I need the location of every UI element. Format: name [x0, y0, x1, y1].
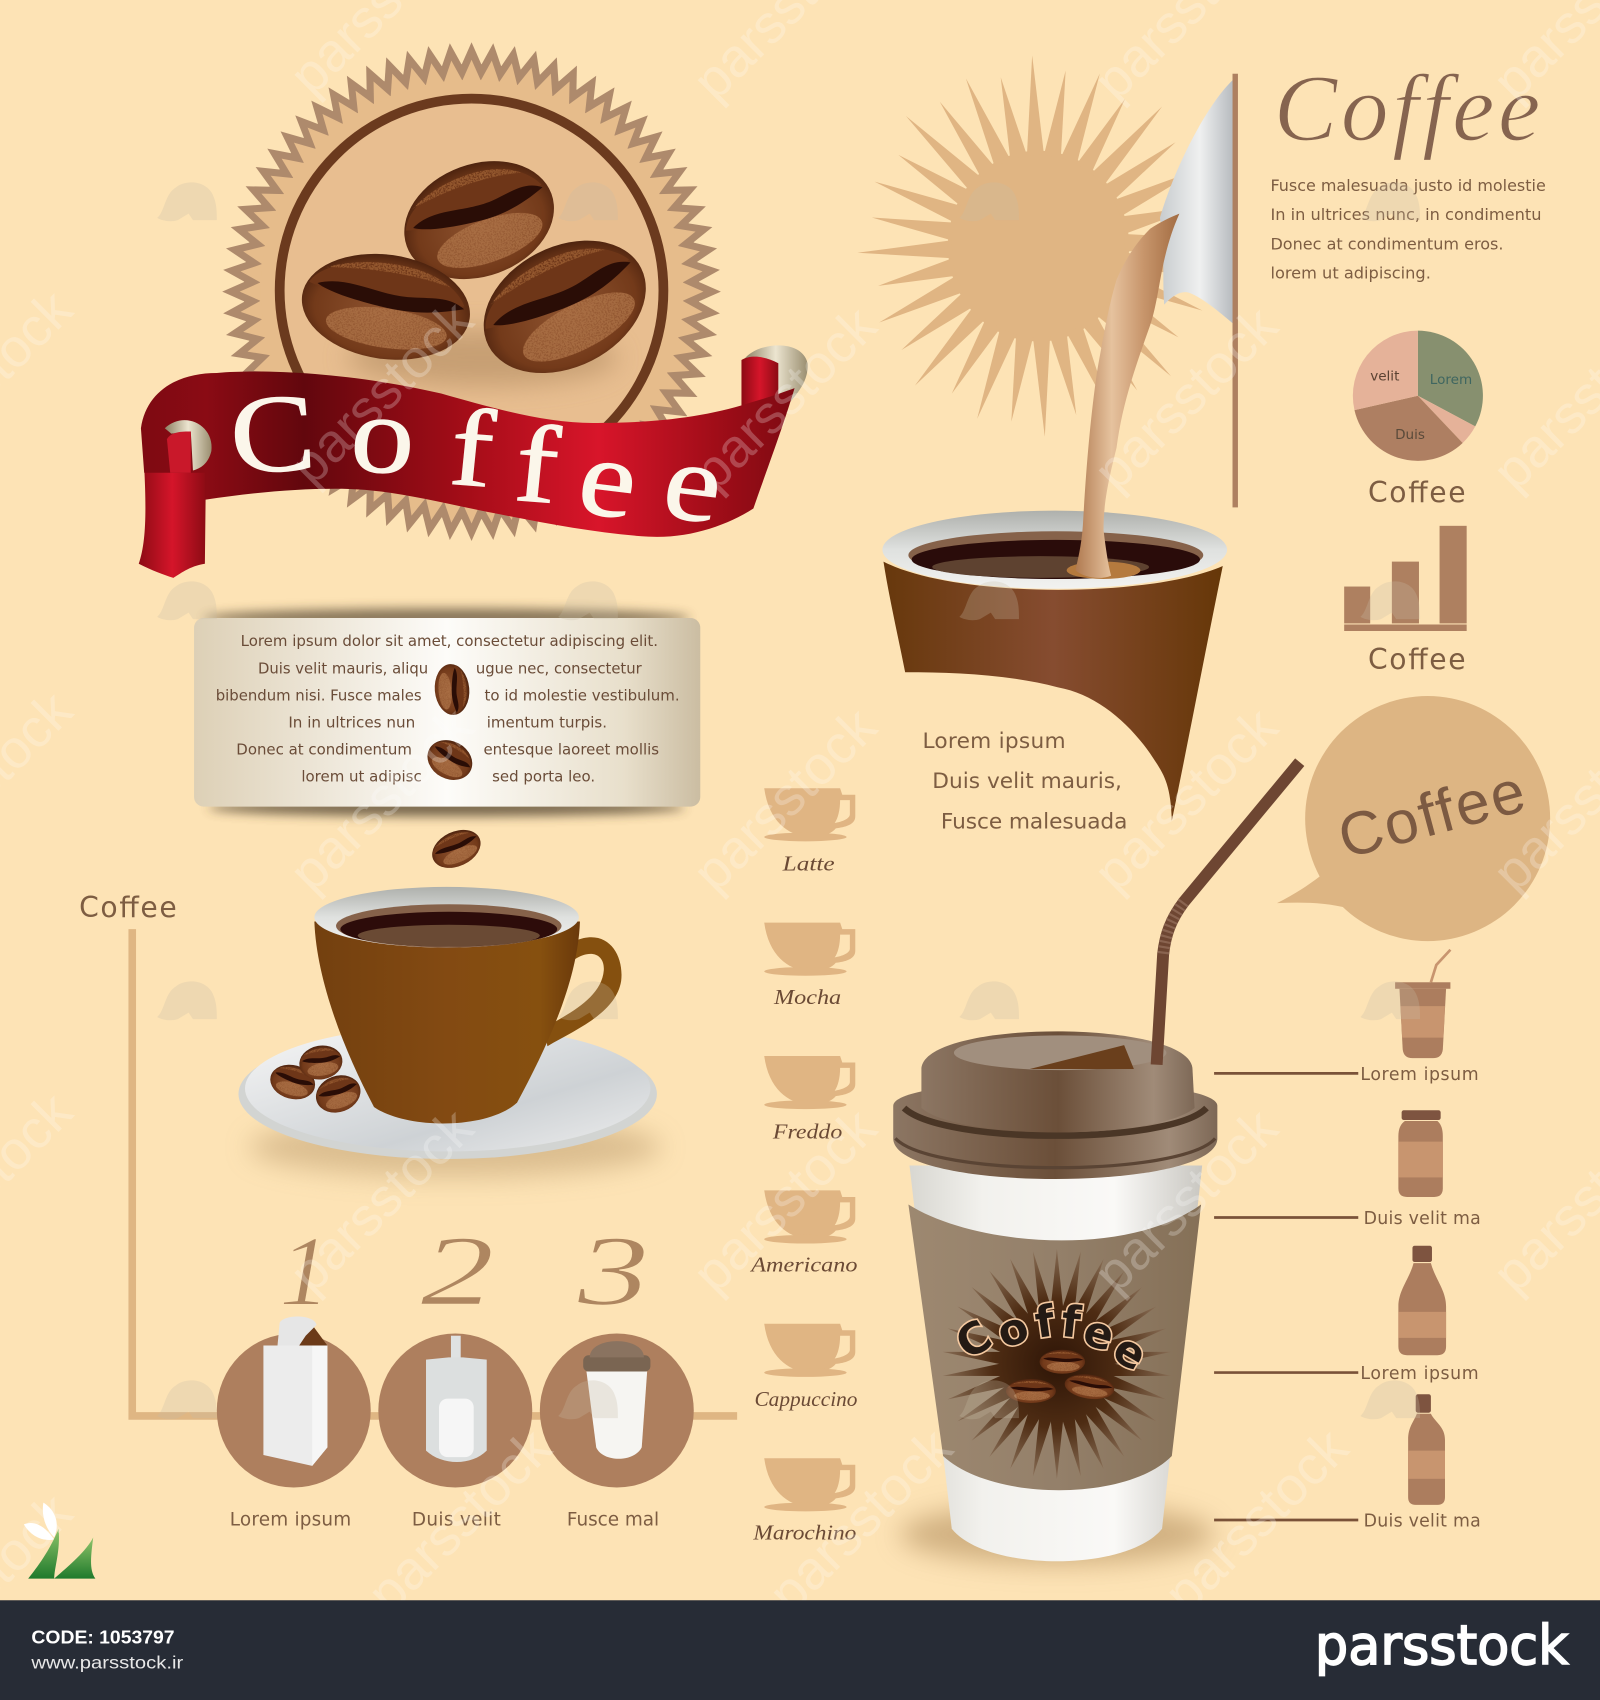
size legend — [1214, 950, 1481, 1532]
card text: Lorem ipsum dolor sit amet, consectetur adipiscing elit. — [241, 632, 658, 650]
pie labels — [1370, 369, 1472, 443]
intro paragraph: In in ultrices nunc, in condimentu — [1270, 205, 1541, 224]
card surface — [194, 618, 700, 807]
slice: velit — [1353, 331, 1418, 410]
saucer — [238, 1026, 657, 1159]
pie caption: Coffee — [1368, 476, 1466, 509]
bean shadows — [347, 330, 618, 386]
item: small bottle size — [1214, 1394, 1481, 1532]
item: Latte — [764, 788, 855, 876]
icon: coffee bean left — [295, 243, 477, 370]
label: Fusce mal — [567, 1509, 659, 1530]
item: Marochino: Marochino — [752, 1523, 856, 1545]
step 3: takeaway cup — [540, 1215, 694, 1530]
banner: red ribbon — [139, 345, 808, 578]
item: cup size — [1214, 950, 1479, 1085]
step 2: pouch — [378, 1215, 532, 1530]
card text: imentum turpis. — [487, 713, 607, 731]
cup body with tail — [883, 562, 1223, 821]
sunburst — [834, 31, 1243, 462]
handle — [544, 937, 622, 1046]
slice: Duis — [1354, 396, 1463, 461]
caption under cup: Lorem ipsum — [922, 729, 1066, 754]
slice: Lorem — [1418, 331, 1483, 426]
item: Cappuccino: Cappuccino — [754, 1389, 857, 1411]
milk stream — [1075, 214, 1179, 578]
item: jar size: Duis velit ma — [1364, 1209, 1481, 1229]
intro paragraph: lorem ut adipiscing. — [1270, 264, 1431, 283]
cup rim — [314, 887, 579, 948]
cup shadow — [900, 1504, 1214, 1564]
speech bubble — [1277, 696, 1550, 941]
pie labels: Lorem — [1430, 372, 1472, 388]
cup body — [314, 922, 580, 1124]
number 2: 2 — [421, 1215, 494, 1326]
item: Freddo — [764, 1056, 855, 1143]
card text: bibendum nisi. Fusce males — [216, 686, 422, 704]
item: Americano: Americano — [749, 1255, 857, 1277]
watermark layer: parsstock — [278, 1097, 485, 1304]
footer bar — [0, 1600, 1600, 1700]
straw — [1157, 762, 1300, 1065]
item: bottle size: Lorem ipsum — [1360, 1364, 1479, 1384]
item: Freddo: Freddo — [772, 1121, 842, 1143]
card text: entesque laoreet mollis — [483, 741, 659, 759]
coffee type list — [749, 788, 857, 1545]
left ribbon tail — [139, 466, 206, 578]
ribbon title: Coffee — [227, 371, 731, 547]
cup rim — [882, 511, 1227, 589]
illustration: cup and saucer — [238, 887, 661, 1177]
watermark layer: parsstock — [278, 289, 485, 496]
caption under cup — [922, 729, 1127, 834]
watermark layer: parsstock — [356, 1417, 563, 1624]
sleeve beans — [1006, 1350, 1116, 1403]
circle — [540, 1334, 694, 1488]
circle — [217, 1334, 371, 1488]
bubble text: Coffee — [1331, 756, 1532, 871]
panel: lorem text card — [194, 608, 700, 816]
sleeve sunburst — [931, 1239, 1183, 1488]
card text: ugue nec, consectetur — [476, 659, 642, 677]
coffee surface — [336, 904, 562, 948]
bubble tail — [1277, 876, 1350, 909]
milk pitcher — [1160, 80, 1233, 323]
item: Mocha — [764, 923, 855, 1009]
saucer shadow — [249, 1117, 661, 1177]
item: jar size — [1214, 1110, 1481, 1229]
number 1: 1 — [280, 1215, 330, 1326]
illustration: milk pouring into cup — [834, 31, 1243, 834]
intro paragraph: Fusce malesuada justo id molestie — [1270, 176, 1546, 195]
bar chart caption: Coffee — [1368, 643, 1466, 676]
right ribbon curl — [741, 345, 808, 425]
item: Latte: Latte — [781, 854, 835, 876]
card text: lorem ut adipisc — [301, 768, 422, 786]
watermark layer: parsstock — [757, 1417, 964, 1624]
frame heading: Coffee — [79, 891, 177, 924]
vertical divider — [1233, 74, 1238, 507]
card text: Donec at condimentum — [236, 741, 412, 759]
watermark layer: parsstock — [682, 1097, 889, 1304]
icon: bean in card lower — [420, 732, 479, 788]
label: Lorem ipsum — [230, 1509, 351, 1530]
label: Duis velit — [412, 1509, 501, 1530]
title: Coffee — [1274, 55, 1540, 161]
footer code: CODE: 1053797 — [31, 1627, 175, 1648]
item: cup size: Lorem ipsum — [1360, 1065, 1479, 1085]
footer url: www.parsstock.ir — [30, 1653, 183, 1673]
pie labels: Duis — [1395, 427, 1425, 443]
sleeve — [908, 1205, 1201, 1490]
caption under cup: Fusce malesuada — [941, 809, 1127, 834]
card text: In in ultrices nun — [288, 713, 415, 731]
icon: flower and grass — [24, 1503, 95, 1579]
left ribbon curl — [165, 420, 212, 473]
icon: falling bean — [426, 823, 487, 875]
icon: coffee bean top — [388, 141, 571, 299]
watermark layer: parsstock — [1083, 1097, 1290, 1304]
circle — [378, 1334, 532, 1488]
brown oval ring — [280, 99, 663, 482]
sawtooth ring — [198, 18, 745, 565]
watermark layer: parsstock — [1153, 1417, 1360, 1624]
card text: Duis velit mauris, aliqu — [258, 659, 428, 677]
bar chart — [1344, 526, 1467, 631]
icon: bean in card — [433, 663, 471, 716]
steps frame with label — [79, 891, 737, 1416]
lid rim — [893, 1081, 1217, 1179]
card shadows — [203, 608, 691, 816]
cup — [583, 1341, 650, 1459]
coffee — [908, 531, 1203, 579]
watermark layer: parsstock — [278, 696, 485, 903]
milk splash — [1067, 562, 1140, 579]
pie labels: velit — [1370, 369, 1399, 385]
intro paragraph — [1270, 176, 1546, 283]
L-shaped frame line — [132, 929, 737, 1416]
item: bottle size — [1214, 1246, 1479, 1384]
illustration: takeaway cup with straw — [893, 762, 1300, 1564]
intro paragraph: Donec at condimentum eros. — [1270, 234, 1504, 253]
card text: sed porta leo. — [492, 768, 595, 786]
card text: to id molestie vestibulum. — [485, 686, 680, 704]
cup body — [909, 1165, 1202, 1561]
slice: small — [1418, 396, 1475, 443]
item: Cappuccino — [754, 1324, 857, 1411]
watermark layer: parsstock — [1083, 696, 1290, 903]
pouch — [426, 1336, 487, 1462]
icon: beans on saucer — [266, 1042, 366, 1119]
footer logo: parsstock — [1315, 1614, 1569, 1677]
pie chart — [1353, 331, 1483, 461]
watermark layer: parsstock — [1083, 295, 1290, 502]
badge: sawtooth medallion with coffee beans — [198, 18, 745, 565]
step 1: carton — [217, 1215, 371, 1530]
item: Mocha: Mocha — [773, 987, 841, 1009]
card text — [216, 632, 680, 786]
ribbon band — [141, 372, 795, 537]
number 3: 3 — [576, 1215, 649, 1326]
item: small bottle size: Duis velit ma — [1364, 1512, 1481, 1532]
sleeve text: Coffee — [947, 1296, 1155, 1382]
watermark layer: parsstock — [682, 696, 889, 903]
icon: coffee bean right — [461, 214, 668, 399]
lid top — [921, 1031, 1195, 1132]
item: Americano — [749, 1190, 857, 1277]
watermark layer: parsstock — [682, 295, 889, 502]
item: Marochino — [752, 1458, 856, 1545]
caption under cup: Duis velit mauris, — [932, 769, 1122, 794]
carton — [263, 1316, 327, 1466]
